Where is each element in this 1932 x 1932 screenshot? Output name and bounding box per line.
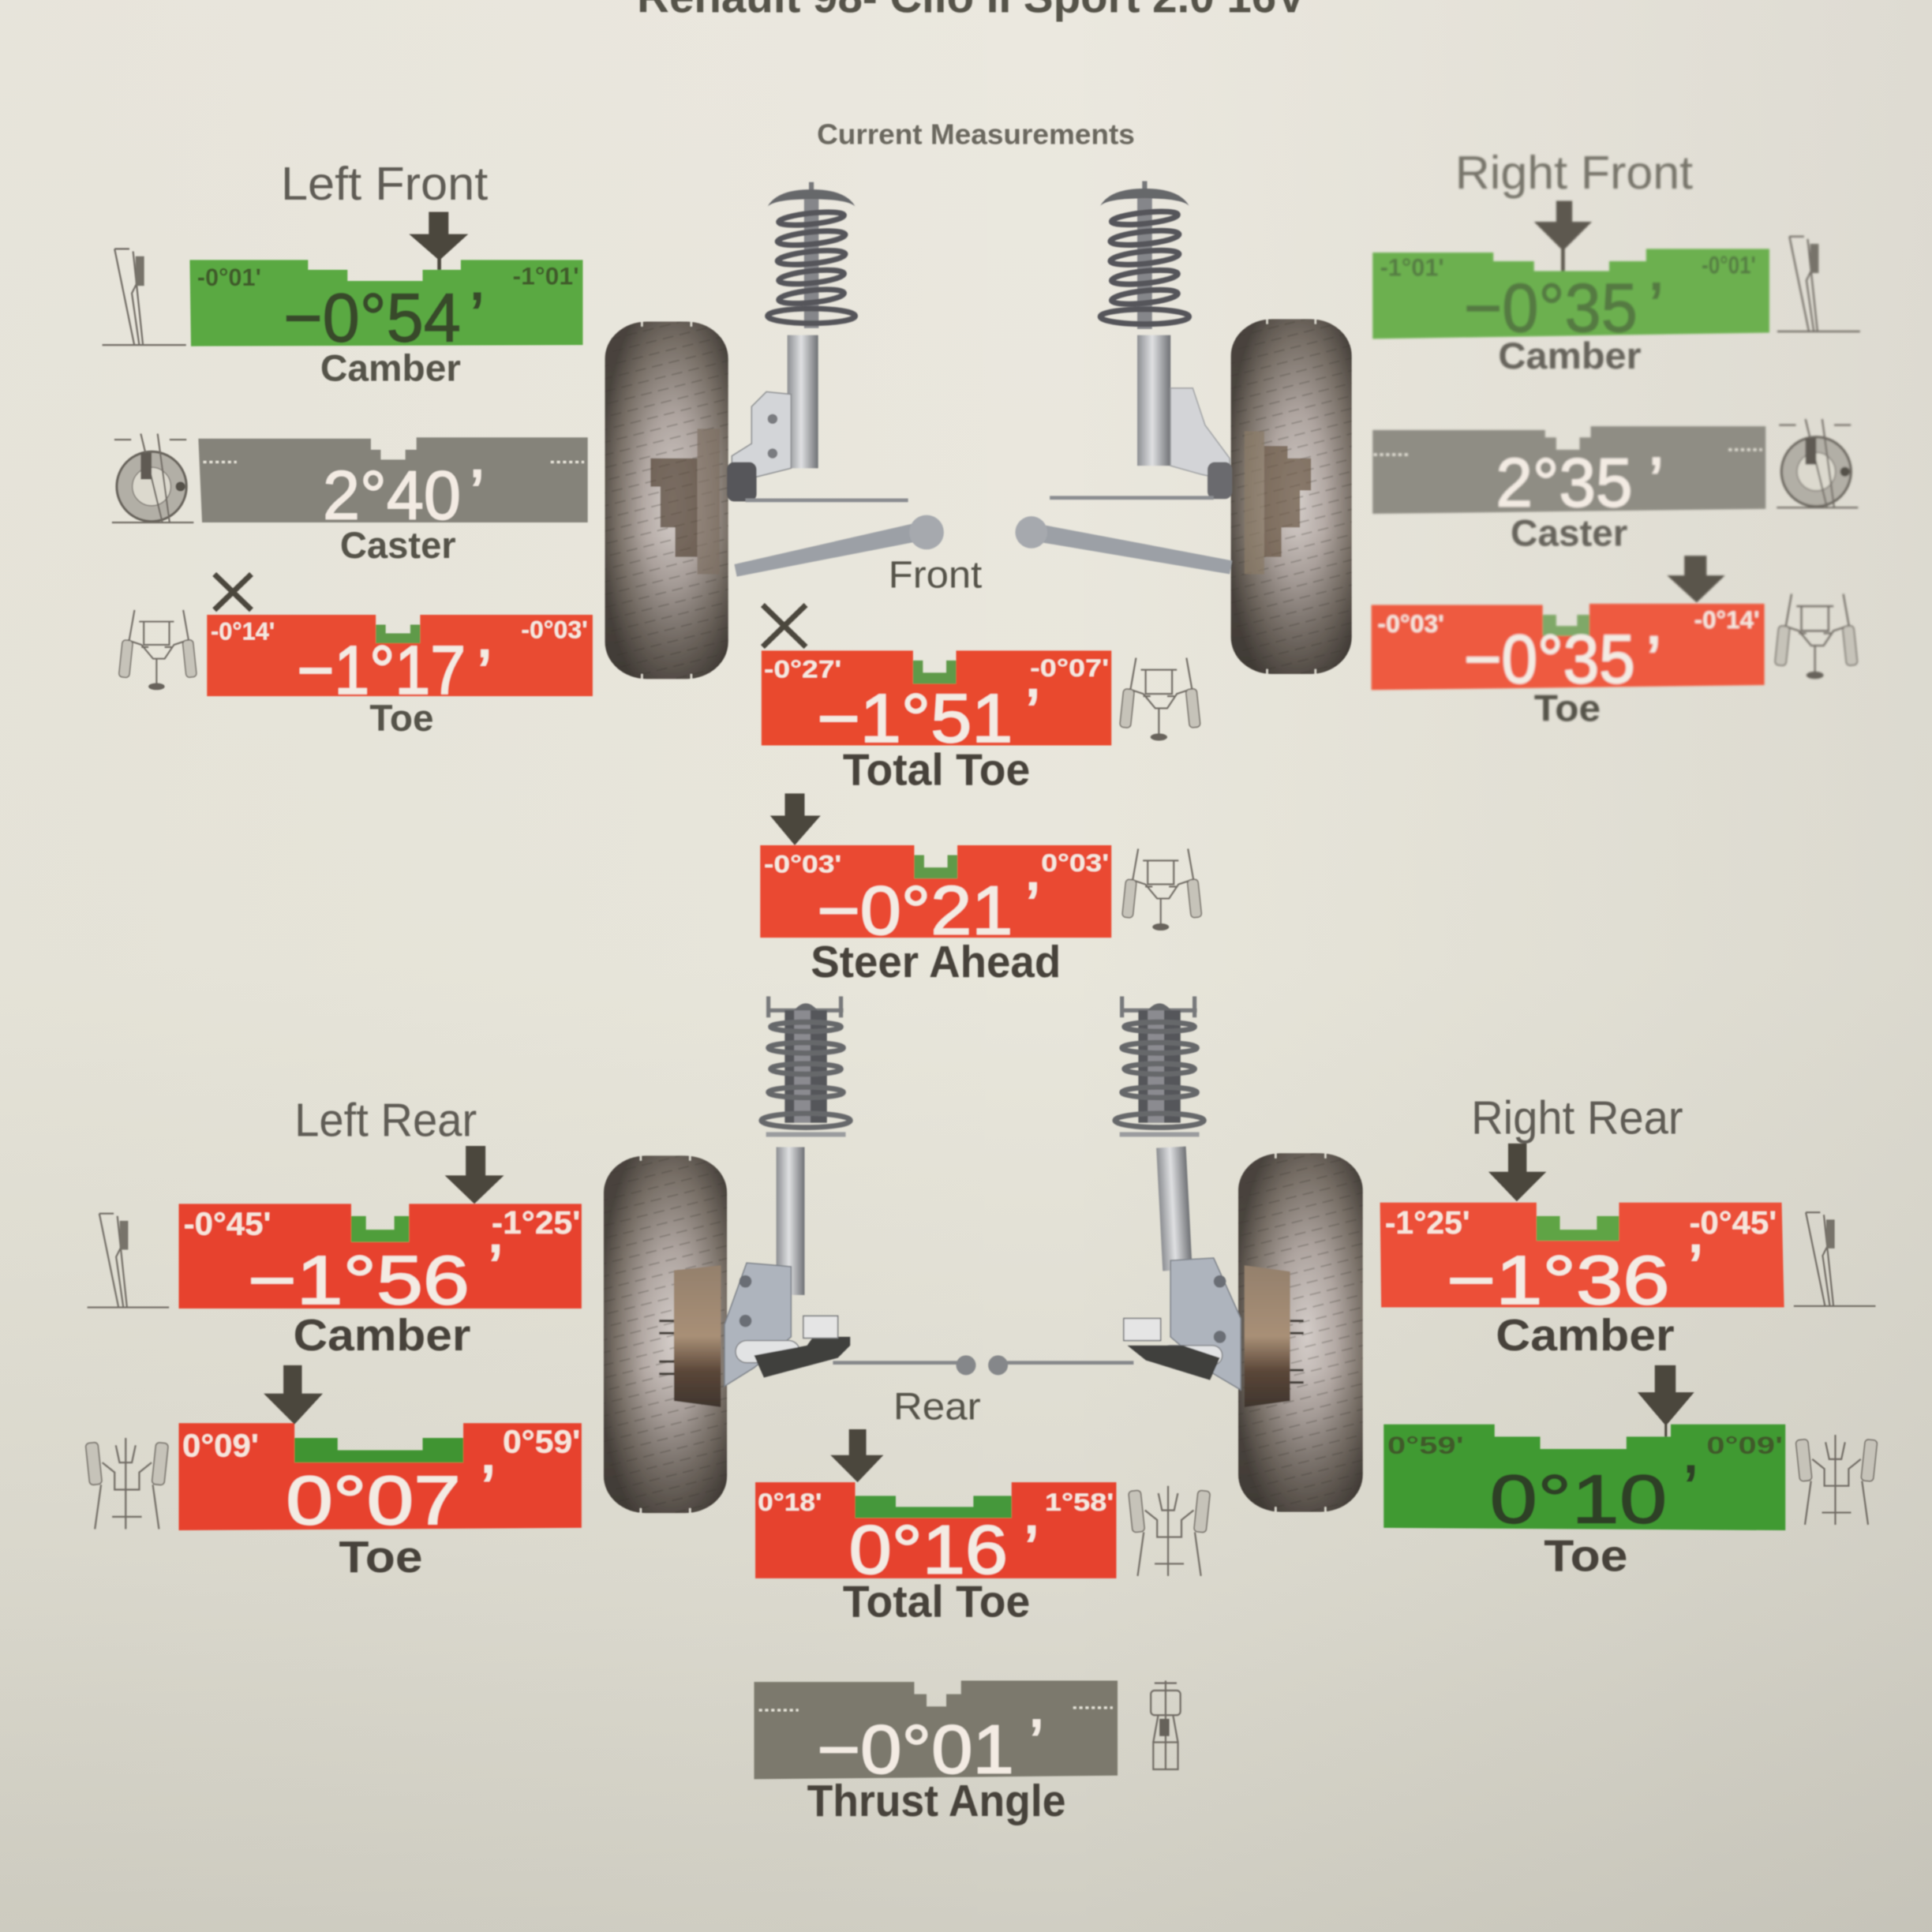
gauge bar: [178, 1423, 582, 1530]
left front tie rod: [746, 499, 908, 501]
limit labels: -0°14': [1694, 606, 1759, 634]
limit dots: [1374, 450, 1762, 455]
steer ahead value: ’: [1025, 868, 1040, 945]
toe label: Toe: [339, 1532, 423, 1582]
camber label: Camber: [294, 1310, 471, 1360]
left rear coil spring: [762, 996, 850, 1134]
camber label: Camber: [1498, 335, 1642, 376]
icon: caster diagram: [112, 433, 193, 522]
limit labels: -0°01': [1702, 252, 1756, 279]
limit labels: 0°18': [758, 1488, 822, 1516]
camber value: [1447, 1230, 1703, 1319]
limit dots: [759, 1708, 1113, 1710]
camber value: ’: [1649, 268, 1664, 345]
caster value: ’: [1649, 443, 1664, 520]
panel: total toe front: [762, 605, 1200, 795]
limit labels: 0°09': [1706, 1432, 1783, 1459]
limit labels: -0°45': [184, 1205, 271, 1241]
indicator arrow: [264, 1365, 323, 1425]
gauge bar: [754, 1681, 1118, 1779]
gauge bar: [1383, 1425, 1785, 1530]
gauge bar: [760, 845, 1111, 938]
camber value: −1°36: [1447, 1241, 1669, 1319]
gauge bar: [178, 1204, 582, 1309]
limit labels: 0°59': [503, 1424, 580, 1460]
caster value: 2°40: [323, 456, 461, 534]
total toe label: Total Toe: [843, 1576, 1030, 1626]
icon: total toe diagram: [1120, 658, 1200, 740]
panel: left rear camber: [88, 1146, 582, 1360]
indicator arrow: [1534, 200, 1592, 271]
camber value: [248, 1230, 504, 1319]
panel: thrust angle: [754, 1681, 1181, 1825]
out of range cross: [215, 575, 251, 610]
panel: left front camber: [103, 212, 582, 388]
limit labels: [197, 263, 579, 291]
toe label: Toe: [1544, 1531, 1627, 1581]
right front tie rod: [1050, 496, 1214, 499]
gauge bar: [198, 437, 588, 522]
left front bracket: [727, 391, 791, 501]
limit labels: [182, 1424, 580, 1463]
right rear rod: [988, 1355, 1133, 1375]
icon: toe diagram: [118, 610, 197, 690]
limit labels: -1°25': [492, 1204, 580, 1241]
limit labels: -0°45': [1689, 1204, 1777, 1241]
limit labels: -1°01': [512, 263, 579, 290]
camber value: ’: [470, 278, 485, 355]
camber value: −0°35: [1464, 269, 1638, 346]
panel: right front toe: [1372, 556, 1858, 728]
camber value: ’: [1688, 1230, 1703, 1308]
panel: right front caster: [1372, 419, 1858, 554]
caster value: 2°35: [1496, 444, 1633, 522]
total toe value: −1°51: [817, 680, 1013, 757]
limit labels: [184, 1204, 580, 1241]
label: rear: Rear: [893, 1386, 981, 1428]
subtitle: current measurements: Current Measurements: [817, 119, 1135, 151]
indicator arrow: [445, 1146, 504, 1204]
thrust angle label: Thrust Angle: [807, 1776, 1065, 1825]
label: front: Front: [889, 554, 983, 597]
green zone: [351, 1216, 409, 1242]
panel: left front caster: [112, 433, 588, 566]
indicator arrow: [770, 793, 821, 845]
camber label: Camber: [1496, 1310, 1675, 1360]
left rear trailing link: [754, 1316, 850, 1377]
limit labels: [1385, 1204, 1777, 1241]
limit labels: [1387, 1432, 1783, 1459]
limit labels: -0°03': [764, 850, 841, 878]
caster label: Caster: [1511, 513, 1627, 554]
left rear bracket: [724, 1263, 799, 1386]
limit labels: [211, 616, 588, 645]
right front strut tube: [1137, 335, 1170, 466]
right rear coil spring: [1115, 996, 1204, 1134]
total toe label: Total Toe: [843, 745, 1030, 795]
right rear strut tube: [1156, 1147, 1193, 1271]
camber value: −1°56: [248, 1241, 470, 1319]
right front coil spring: [1100, 182, 1189, 329]
steer ahead value: −0°21: [817, 871, 1013, 949]
indicator arrow: [1488, 1144, 1546, 1201]
gauge bar: [762, 650, 1111, 746]
heading: right rear: Right Rear: [1471, 1091, 1683, 1144]
thrust angle value: −0°01: [817, 1711, 1014, 1788]
toe value: ’: [1683, 1451, 1698, 1528]
right rear tire: [1238, 1153, 1363, 1512]
toe label: Toe: [369, 698, 434, 739]
icon: caster diagram: [1777, 419, 1858, 507]
rear left wheel and suspension: [604, 996, 975, 1513]
panel: right rear toe: [1383, 1365, 1878, 1581]
limit labels: -0°03': [521, 616, 588, 644]
total toe value: ’: [1025, 675, 1040, 752]
left rear brake drum: [674, 1265, 721, 1407]
left front strut tube: [788, 335, 818, 468]
front right wheel and suspension: [1015, 182, 1352, 674]
toe label: Toe: [1534, 687, 1601, 728]
right front bracket: [1170, 388, 1232, 499]
limit labels: -0°07': [1030, 654, 1109, 682]
toe value: [1490, 1451, 1698, 1538]
gauge bar: [755, 1482, 1116, 1578]
icon: rear toe diagram: [1795, 1435, 1878, 1525]
caster label: Caster: [340, 525, 456, 566]
rear right wheel and suspension: [988, 996, 1363, 1512]
left rear strut tube: [777, 1148, 804, 1295]
toe value: 0°07: [286, 1462, 461, 1539]
panel: left rear toe: [85, 1365, 582, 1582]
left front hub: [650, 429, 720, 575]
green zone: [914, 855, 957, 878]
right rear wheel studs: [1290, 1321, 1304, 1383]
indicator arrow: [1638, 1365, 1694, 1436]
total toe value: 0°16: [849, 1511, 1008, 1589]
green zone: [376, 625, 420, 643]
heading: left front: Left Front: [281, 157, 489, 210]
gauge bar: [207, 615, 593, 696]
toe value: [286, 1451, 496, 1539]
limit dots: [204, 461, 584, 462]
right rear trailing link: [1124, 1319, 1220, 1380]
right front hub: [1245, 431, 1311, 575]
toe value: ’: [1646, 621, 1661, 698]
limit labels: 0°03': [1041, 849, 1109, 877]
limit labels: [764, 654, 1109, 683]
limit labels: 0°59': [1387, 1432, 1464, 1459]
icon: steer ahead diagram: [1122, 848, 1202, 930]
green zone: [294, 1438, 463, 1462]
limit labels: [1380, 252, 1756, 282]
right front control arm: [1015, 516, 1232, 575]
gauge bar: [1372, 426, 1765, 514]
limit labels: [1377, 606, 1759, 638]
left front tire: [605, 321, 728, 679]
icon: rear toe diagram: [85, 1438, 168, 1529]
panel: left front toe: [118, 575, 593, 739]
icon: thrust angle diagram: [1151, 1681, 1181, 1769]
panel: steer ahead: [760, 793, 1202, 987]
gauge bar: [189, 260, 582, 346]
toe value: ’: [481, 1451, 496, 1528]
icon: camber diagram: [1794, 1212, 1875, 1306]
indicator arrow: [409, 212, 468, 270]
limit labels: -0°14': [211, 617, 275, 645]
left rear wheel studs: [659, 1321, 674, 1374]
camber value: −0°54: [283, 279, 461, 356]
icon: rear total toe diagram: [1129, 1486, 1210, 1576]
right rear brake drum: [1245, 1265, 1290, 1407]
gauge bar: [1372, 249, 1769, 339]
gauge bar: [1372, 604, 1765, 690]
icon: camber diagram: [103, 249, 186, 345]
limit labels: -1°01': [1380, 254, 1444, 282]
toe value: −0°35: [1464, 620, 1635, 698]
limit labels: -1°25': [1385, 1204, 1470, 1241]
icon: camber diagram: [88, 1214, 169, 1308]
heading: right front: Right Front: [1455, 146, 1694, 199]
limit labels: 1°58': [1045, 1488, 1114, 1516]
limit labels: -0°03': [1377, 610, 1444, 638]
icon: camber diagram: [1777, 237, 1860, 331]
toe value: ’: [477, 635, 492, 713]
toe value: 0°10: [1490, 1461, 1667, 1538]
limit labels: [764, 849, 1109, 878]
limit labels: -0°01': [197, 264, 261, 291]
camber label: Camber: [320, 347, 461, 388]
green zone: [1537, 1216, 1619, 1241]
left rear tire: [604, 1155, 727, 1513]
total toe value: ’: [1024, 1511, 1039, 1589]
panel: total toe rear: [755, 1429, 1210, 1626]
thrust angle value: ’: [1029, 1705, 1044, 1782]
green zone: [1543, 615, 1589, 636]
limit labels: [758, 1488, 1114, 1516]
panel: right rear camber: [1380, 1144, 1875, 1360]
front left wheel and suspension: [605, 182, 944, 679]
right rear bracket: [1161, 1258, 1241, 1390]
limit labels: -0°27': [764, 656, 841, 683]
right front tire: [1231, 319, 1352, 674]
out of range cross: [762, 605, 806, 647]
icon: toe diagram: [1775, 594, 1858, 679]
green zone: [913, 661, 957, 683]
left front coil spring: [768, 182, 856, 328]
left rear rod: [833, 1355, 975, 1375]
heading: left rear: Left Rear: [294, 1093, 477, 1146]
indicator arrow: [830, 1429, 883, 1482]
left front control arm: [734, 515, 944, 577]
camber value: ’: [488, 1230, 504, 1308]
toe value: −1°17: [297, 631, 466, 709]
indicator arrow: [1667, 556, 1725, 602]
green zone: [855, 1496, 1012, 1518]
steer ahead label: Steer Ahead: [811, 937, 1061, 987]
limit labels: 0°09': [182, 1427, 259, 1463]
gauge bar: [1380, 1203, 1784, 1307]
panel: right front camber: [1372, 200, 1860, 376]
caster value: ’: [470, 455, 485, 533]
